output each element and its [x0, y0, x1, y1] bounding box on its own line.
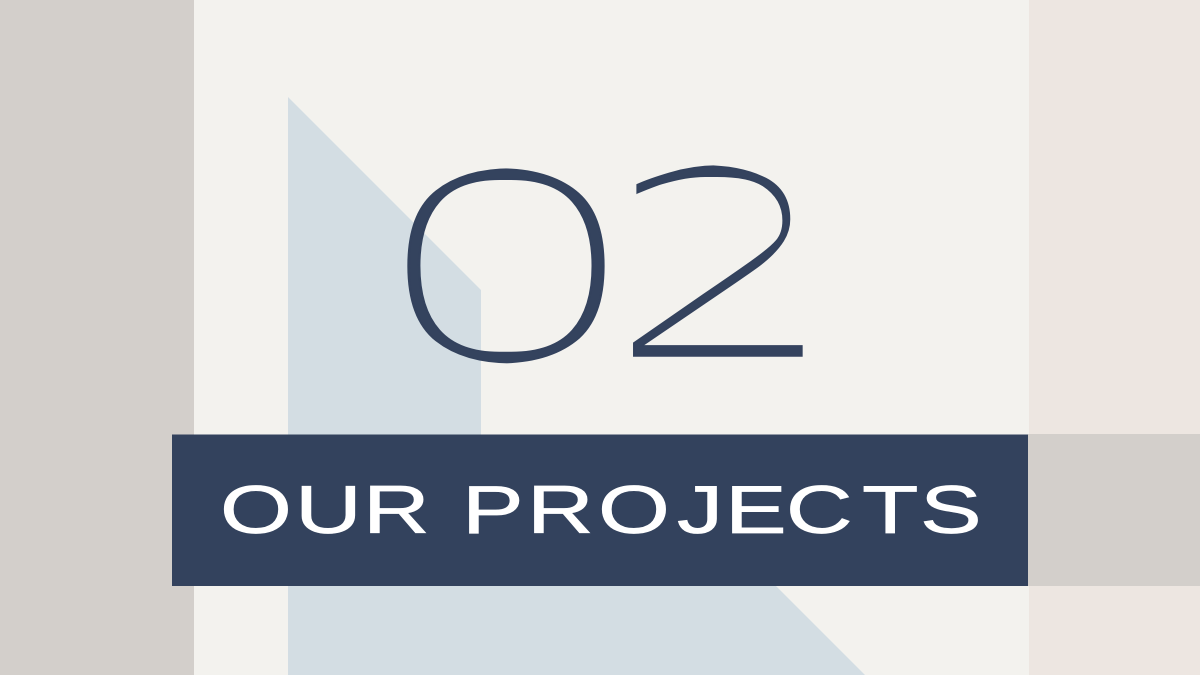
panel: centre background	[194, 0, 1029, 675]
section number	[362, 119, 846, 420]
section number: 0	[362, 122, 652, 420]
section number: 2	[602, 119, 846, 417]
panel: left band	[0, 0, 194, 675]
panel: right band	[1029, 0, 1200, 675]
title banner	[172, 434, 1028, 586]
decorative shape: light blue geometric form	[288, 97, 865, 675]
heading: OUR PROJECTS	[220, 473, 982, 548]
banner background	[172, 434, 1028, 586]
panel: right band accent block	[1028, 434, 1200, 586]
